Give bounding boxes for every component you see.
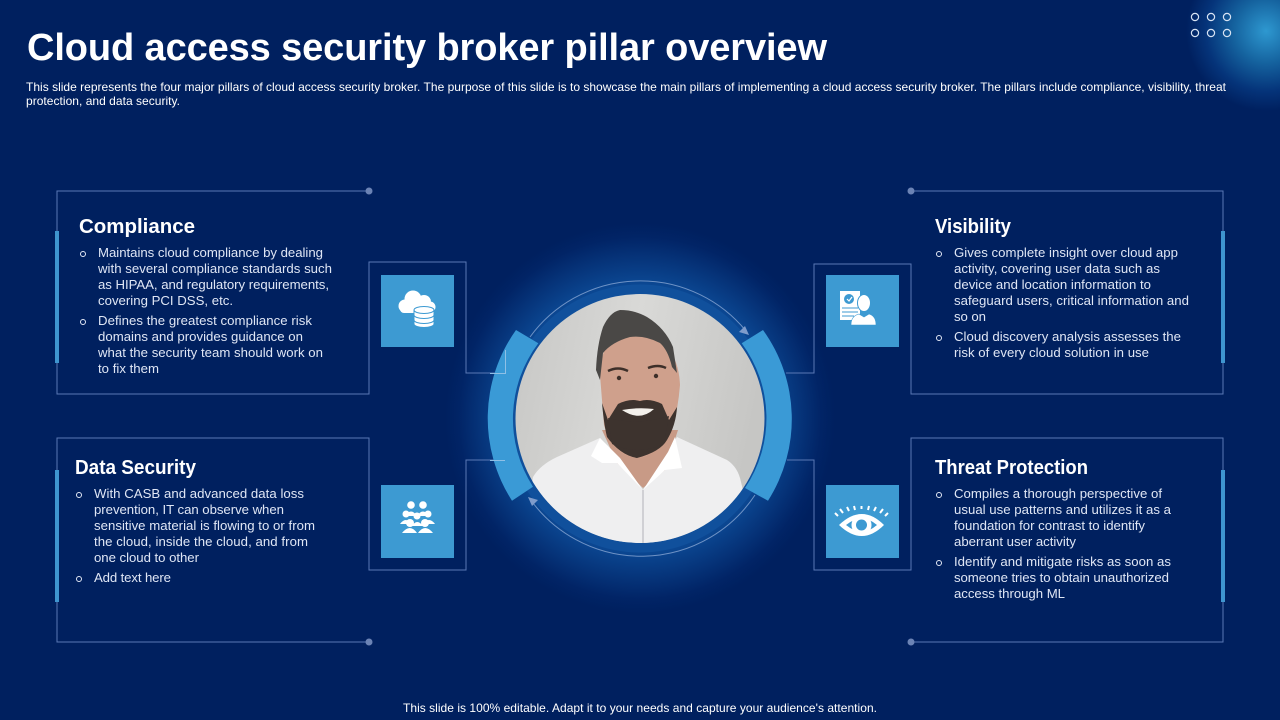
collar <box>591 437 682 490</box>
compliance bullets: domains and provides guidance on <box>98 329 303 344</box>
panel: data security <box>55 438 505 646</box>
visibility outline and connector <box>786 191 1223 394</box>
data security bullets: prevention, IT can observe when <box>94 502 284 517</box>
compliance bullets: Defines the greatest compliance risk <box>98 313 312 328</box>
compliance bullets: what the security team should work on <box>97 345 323 360</box>
threat protection bullets: Identify and mitigate risks as soon as <box>954 554 1171 569</box>
panel: visibility <box>786 188 1225 394</box>
visibility bullets: activity, covering user data such as <box>954 261 1160 276</box>
hair <box>596 310 677 380</box>
threat protection bullets: access through ML <box>954 586 1065 601</box>
connector overlap on wedge <box>490 350 506 460</box>
compliance bullets: covering PCI DSS, etc. <box>98 293 233 308</box>
compliance bullets <box>80 245 332 376</box>
left wedge <box>488 330 538 501</box>
visibility bullets: device and location information to <box>954 277 1151 292</box>
threat protection accent bar <box>1221 470 1225 602</box>
shirt <box>532 437 743 543</box>
threat protection bullets: foundation for contrast to identify <box>954 518 1145 533</box>
visibility bullets <box>936 245 1189 360</box>
compliance bullets: to fix them <box>98 361 159 376</box>
data security outline and connector <box>57 438 505 642</box>
eyes <box>608 366 666 371</box>
data security heading: Data Security <box>75 456 197 479</box>
threat protection bullets: Compiles a thorough perspective of <box>954 486 1162 501</box>
right wedge <box>742 330 792 501</box>
visibility bullets: risk of every cloud solution in use <box>954 345 1149 360</box>
visibility bullets: safeguard users, critical information and <box>954 293 1189 308</box>
visibility bullets: Gives complete insight over cloud app <box>954 245 1178 260</box>
decoration: corner glow with dots <box>1186 0 1280 111</box>
description text <box>26 80 1227 108</box>
compliance bullets: with several compliance standards such <box>97 261 332 276</box>
beard chin <box>608 416 669 444</box>
threat protection end dot <box>908 638 914 646</box>
icon: person with document <box>826 275 899 347</box>
visibility end dot <box>908 188 914 194</box>
beard <box>602 400 677 458</box>
threat protection bullets: someone tries to obtain unauthorized <box>954 570 1169 585</box>
data security bullets: Add text here <box>94 570 171 585</box>
threat protection bullets <box>936 486 1172 601</box>
title: Cloud access security broker pillar overview <box>27 27 827 69</box>
panel: compliance <box>55 188 505 394</box>
data security end dot <box>366 638 372 646</box>
visibility accent bar <box>1221 231 1225 363</box>
visibility heading: Visibility <box>935 215 1012 238</box>
icon: eye <box>826 485 899 558</box>
icon: cloud database <box>381 275 454 347</box>
panel: threat protection <box>787 438 1225 646</box>
dark ring <box>506 284 774 552</box>
visibility bullets: so on <box>954 309 986 324</box>
face <box>600 336 680 430</box>
icon: people group <box>381 485 454 558</box>
data security bullets: sensitive material is flowing to or from <box>94 518 315 533</box>
threat protection heading: Threat Protection <box>935 456 1088 479</box>
description text: protection, and data security. <box>26 94 180 108</box>
compliance end dot <box>366 188 372 194</box>
data security bullets: one cloud to other <box>94 550 200 565</box>
central glow <box>445 223 835 613</box>
threat protection bullets: usual use patterns and utilizes it as a <box>954 502 1172 517</box>
compliance bullets: Maintains cloud compliance by dealing <box>98 245 323 260</box>
neck <box>602 430 678 488</box>
arrow: lower arc <box>528 495 755 556</box>
data security bullets: With CASB and advanced data loss <box>94 486 304 501</box>
threat protection bullets: aberrant user activity <box>954 534 1076 549</box>
threat protection outline and connector <box>787 438 1223 642</box>
compliance bullets: as HIPAA, and regulatory requirements, <box>98 277 329 292</box>
compliance heading: Compliance <box>79 215 195 238</box>
arrow: upper arc <box>530 281 749 337</box>
data security bullets: the cloud, inside the cloud, and from <box>94 534 308 549</box>
compliance outline and connector <box>57 191 505 394</box>
description text: This slide represents the four major pillars of cloud access security broker. The purpose of this slide is to showcase the main pillars of implementing a cloud access security broker. The pillars include compliance, visibility, threat <box>26 80 1227 94</box>
data security bullets <box>76 486 315 585</box>
data security accent bar <box>55 470 59 602</box>
footer note: This slide is 100% editable. Adapt it to your needs and capture your audience's attention. <box>403 701 877 715</box>
visibility bullets: Cloud discovery analysis assesses the <box>954 329 1181 344</box>
compliance accent bar <box>55 231 59 363</box>
portrait photo <box>516 294 764 543</box>
smile <box>622 408 654 416</box>
